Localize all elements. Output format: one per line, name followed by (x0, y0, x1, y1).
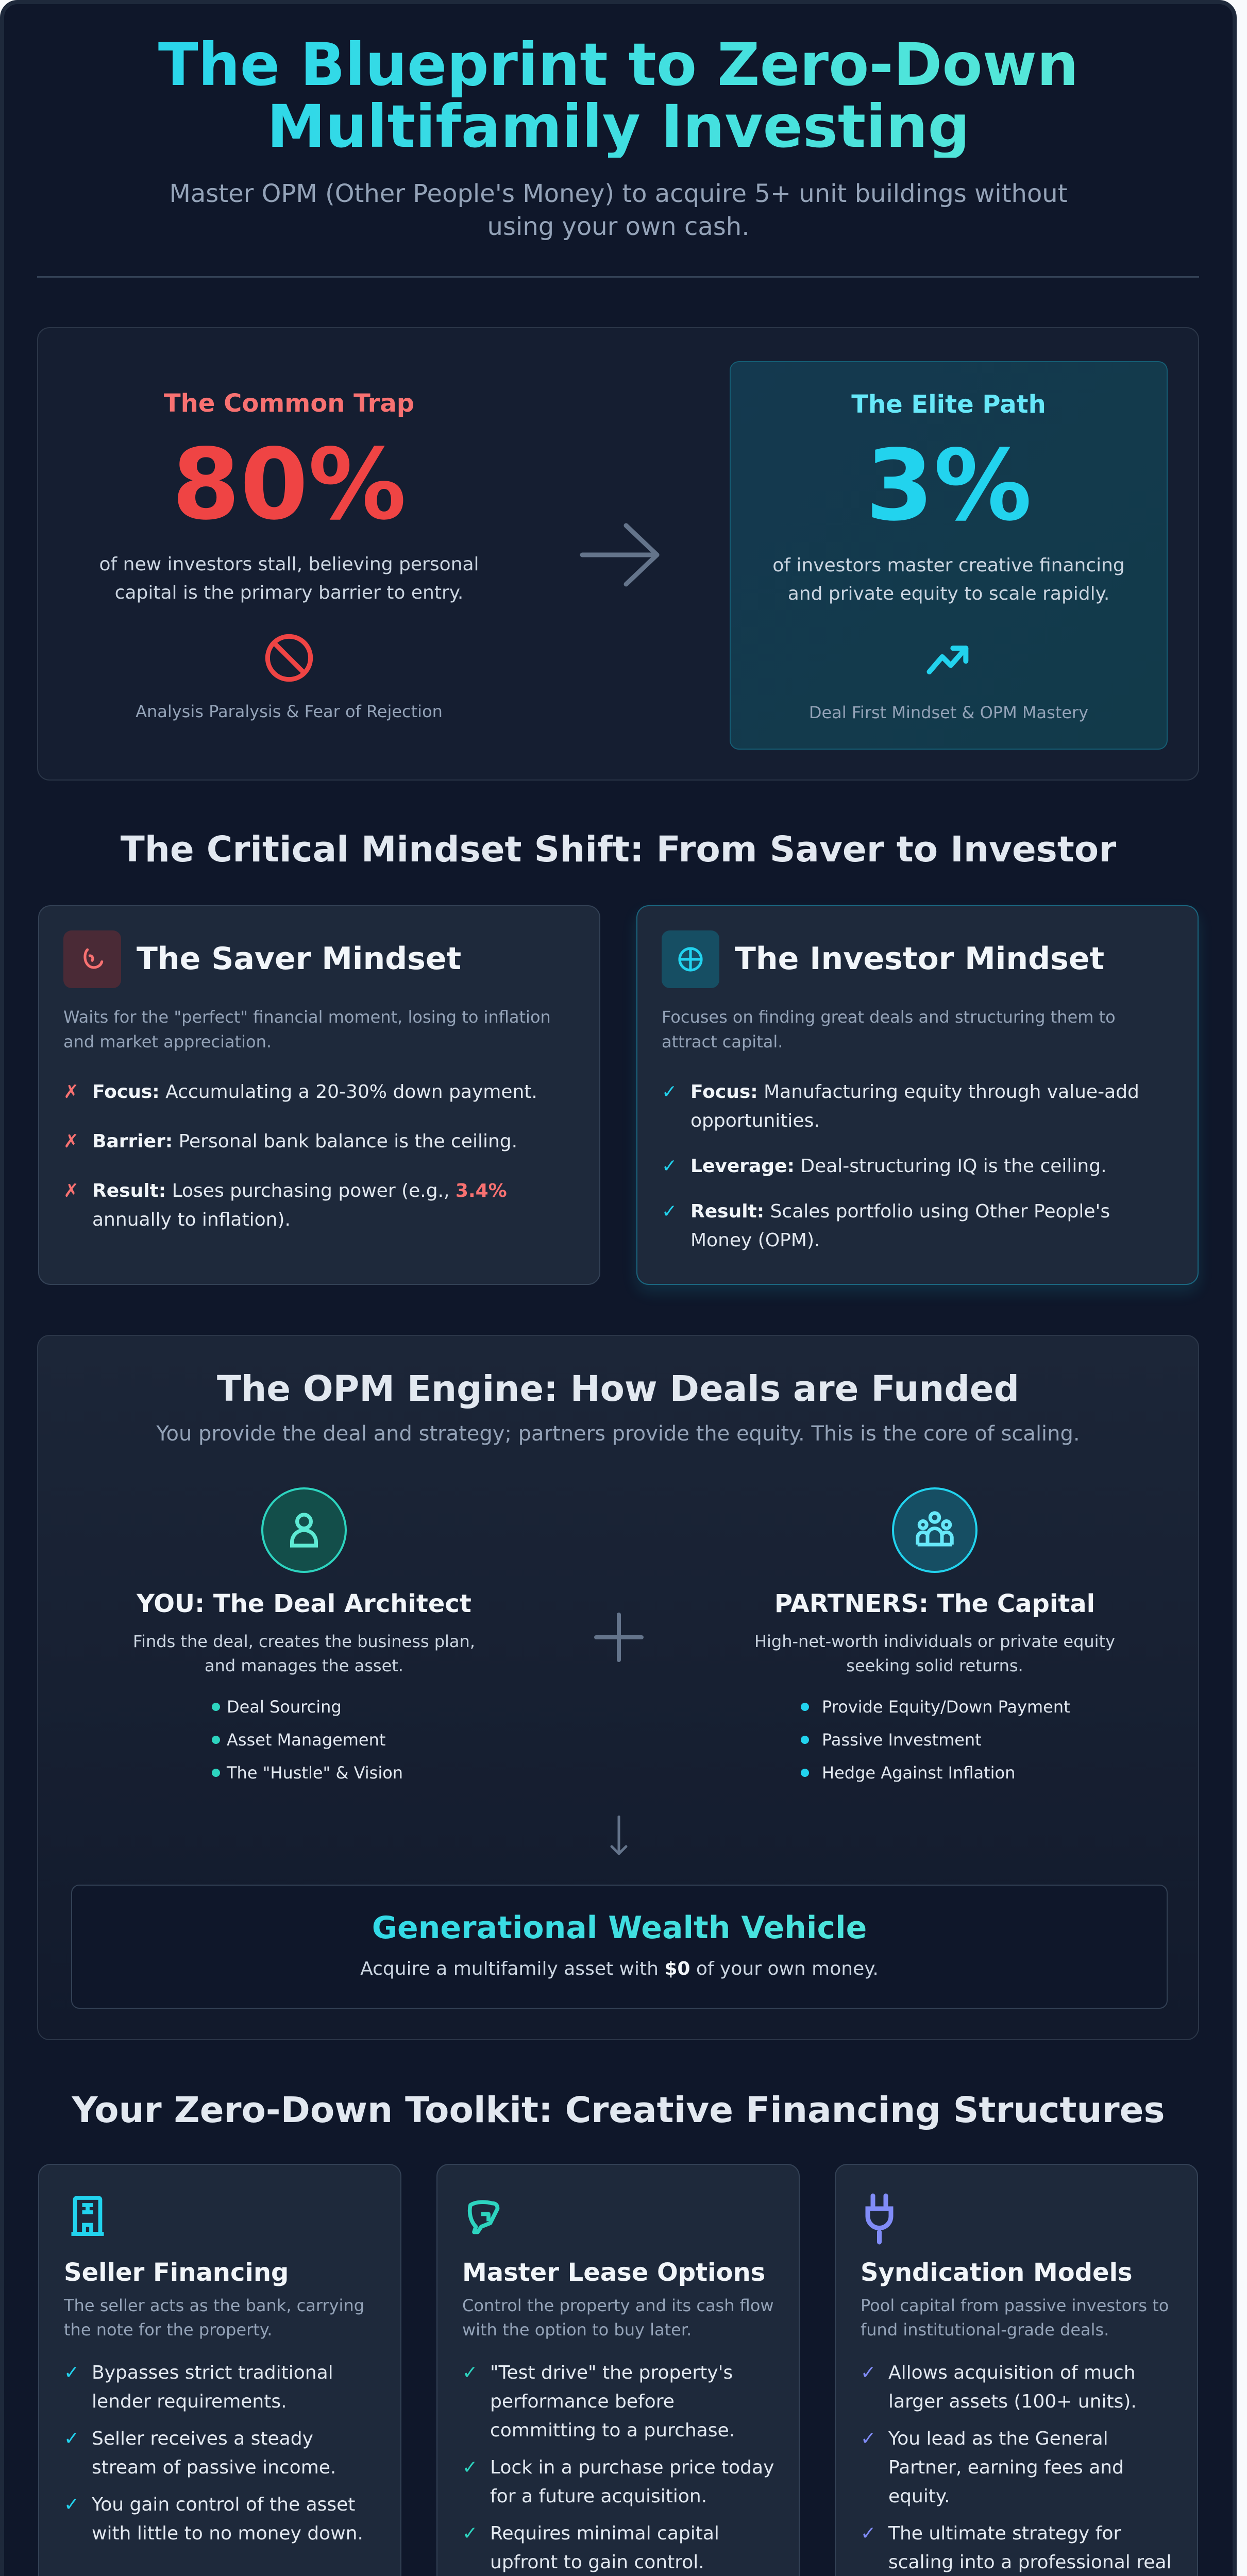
stat: elite path: The Elite Path (851, 390, 1046, 419)
panel: syndication: Pool capital from passive investors to (861, 2296, 1169, 2315)
column: partners: High-net-worth individuals or private equity (754, 1632, 1115, 1651)
title: Multifamily Investing (267, 92, 970, 161)
list: investor traits: Focus: Manufacturing equity through value-add (690, 1081, 1139, 1103)
icon: investor (662, 930, 719, 988)
stat: elite path (730, 361, 1168, 750)
icon: plus (594, 1613, 644, 1662)
panel: master lease: Control the property and its cash flow (462, 2296, 774, 2315)
panel: syndication: Allows acquisition of much (888, 2362, 1136, 2383)
stat: elite path: Deal First Mindset & OPM Mastery (809, 703, 1088, 722)
icon: saver (63, 930, 121, 988)
list: investor traits (662, 1081, 1139, 1251)
panel: syndication: equity. (888, 2486, 950, 2507)
panel: syndication: ✓ (861, 2523, 876, 2544)
icon: building (71, 2196, 104, 2236)
panel: OPM engine: The OPM Engine: How Deals are Funded (217, 1368, 1019, 1410)
panel: master lease: Requires minimal capital (490, 2523, 719, 2544)
panel: seller financing: ✓ (64, 2494, 79, 2515)
list: investor traits: ✓ (662, 1201, 677, 1222)
panel: master lease: ✓ (462, 2523, 478, 2544)
panel: syndication: fund institutional-grade deals. (861, 2320, 1109, 2340)
panel: seller financing: ✓ (64, 2428, 79, 2449)
column: you: Deal Sourcing (227, 1697, 342, 1717)
stat: elite path: 3% (866, 429, 1032, 543)
panel: saver mindset (38, 905, 600, 1285)
stat: common trap: capital is the primary barrier to entry. (115, 582, 463, 603)
panel: OPM engine (37, 1335, 1199, 2040)
icon: handshake (468, 2200, 500, 2234)
panel: saver mindset: and market appreciation. (63, 1032, 272, 1052)
column: partners: seeking solid returns. (846, 1656, 1023, 1675)
panel: syndication: ✓ (861, 2362, 876, 2383)
stat: common trap: Analysis Paralysis & Fear of Rejection (136, 702, 443, 721)
panel: master lease: ✓ (462, 2457, 478, 2478)
icon: ban (265, 634, 313, 682)
panel: master lease: ✓ (462, 2362, 478, 2383)
panel: seller financing: ✓ (64, 2362, 79, 2383)
panel: syndication: Partner, earning fees and (888, 2457, 1124, 2478)
panel: master lease: for a future acquisition. (490, 2486, 707, 2507)
icon: person (261, 1487, 347, 1573)
panel: saver mindset: The Saver Mindset (137, 941, 461, 977)
panel: seller financing: You gain control of the asset (92, 2494, 355, 2515)
panel: syndication: The ultimate strategy for (888, 2523, 1121, 2544)
stat: elite path: of investors master creative financing (772, 555, 1125, 576)
panel: seller financing: the note for the property. (64, 2320, 272, 2340)
callout: wealth vehicle: Acquire a multifamily asset with $0 of your own money. (360, 1958, 879, 1979)
panel: seller financing: Seller Financing (64, 2258, 289, 2287)
heading: mindset shift: The Critical Mindset Shift: From Saver to Investor (121, 829, 1116, 870)
list: saver traits: annually to inflation). (92, 1209, 291, 1230)
list: investor traits: ✓ (662, 1156, 677, 1177)
icon: group (892, 1487, 978, 1573)
stat: common trap: 80% (172, 428, 406, 541)
column: you: YOU: The Deal Architect (137, 1589, 471, 1618)
panel: syndication: You lead as the General (888, 2428, 1108, 2449)
stat: common trap (99, 389, 479, 721)
panel: syndication: larger assets (100+ units). (888, 2391, 1137, 2412)
list: investor traits: Result: Scales portfolio using Other People's (690, 1201, 1110, 1222)
panel: master lease: "Test drive" the property's (490, 2362, 733, 2383)
panel: seller financing: The seller acts as the bank, carrying (64, 2296, 364, 2315)
panel: seller financing: Bypasses strict traditional (92, 2362, 333, 2383)
panel: investor mindset: Focuses on finding great deals and structuring them to (662, 1007, 1116, 1027)
list: investor traits: Money (OPM). (690, 1230, 820, 1251)
panel: syndication: Syndication Models (861, 2258, 1133, 2287)
subtitle: Master OPM (Other People's Money) to acquire 5+ unit buildings without (169, 179, 1068, 208)
panel: syndication (835, 2164, 1198, 2576)
list: saver traits: ✗ (63, 1131, 79, 1152)
list: saver traits: Result: Loses purchasing power (e.g., 3.4% (92, 1180, 507, 1201)
subtitle: using your own cash. (487, 212, 749, 241)
column: partners: Hedge Against Inflation (822, 1763, 1015, 1783)
panel: seller financing: lender requirements. (92, 2391, 287, 2412)
column: partners: Provide Equity/Down Payment (822, 1697, 1070, 1717)
stat: elite path: and private equity to scale rapidly. (788, 583, 1109, 604)
list: investor traits: Leverage: Deal-structuring IQ is the ceiling. (690, 1156, 1107, 1177)
panel: syndication: ✓ (861, 2428, 876, 2449)
panel: stats comparison (37, 327, 1199, 781)
panel: syndication: scaling into a professional real (888, 2552, 1171, 2573)
panel: master lease: with the option to buy later. (462, 2320, 692, 2340)
list: saver traits: ✗ (63, 1081, 79, 1103)
panel: master lease: performance before (490, 2391, 675, 2412)
title: The Blueprint to Zero-Down (158, 30, 1079, 99)
list: investor traits: ✓ (662, 1081, 677, 1103)
panel: investor mindset: attract capital. (662, 1032, 783, 1052)
panel: master lease: committing to a purchase. (490, 2420, 735, 2441)
list: saver traits (63, 1081, 537, 1230)
column: you: Asset Management (227, 1730, 385, 1750)
panel: investor mindset (636, 905, 1199, 1285)
heading: toolkit: Your Zero-Down Toolkit: Creative Financing Structures (72, 2090, 1165, 2131)
icon: plug (866, 2194, 894, 2244)
panel: master lease: Lock in a purchase price today (490, 2457, 774, 2478)
column: partners: Passive Investment (822, 1730, 982, 1750)
panel: OPM engine: You provide the deal and strategy; partners provide the equity. This is the core of scaling. (156, 1422, 1080, 1446)
stat: common trap: The Common Trap (164, 389, 414, 418)
column: you (133, 1487, 475, 1783)
panel: investor mindset: The Investor Mindset (735, 941, 1104, 977)
icon: trending up (926, 646, 969, 674)
list: saver traits: ✗ (63, 1180, 79, 1201)
subtitle (169, 179, 1068, 241)
panel: seller financing: with little to no money down. (92, 2523, 363, 2544)
list: saver traits: Barrier: Personal bank balance is the ceiling. (92, 1131, 517, 1152)
panel: seller financing: Seller receives a steady (92, 2428, 313, 2449)
panel: seller financing (38, 2164, 401, 2576)
list: investor traits: opportunities. (690, 1110, 820, 1131)
panel: master lease: upfront to gain control. (490, 2552, 704, 2573)
stat: common trap: of new investors stall, believing personal (99, 554, 479, 575)
column: you: and manages the asset. (205, 1656, 403, 1675)
panel: master lease: Master Lease Options (462, 2258, 765, 2287)
column: you: The "Hustle" & Vision (227, 1763, 403, 1783)
column: you: Finds the deal, creates the business plan, (133, 1632, 475, 1651)
column: partners: PARTNERS: The Capital (774, 1589, 1095, 1618)
arrow (580, 523, 660, 586)
callout: wealth vehicle (71, 1885, 1168, 2009)
panel: seller financing: stream of passive income. (92, 2457, 336, 2478)
panel: saver mindset: Waits for the "perfect" financial moment, losing to inflation (63, 1007, 551, 1027)
column: partners (754, 1487, 1115, 1783)
arrow: down (610, 1816, 628, 1855)
list: saver traits: Focus: Accumulating a 20-30% down payment. (92, 1081, 537, 1103)
title (0, 34, 1237, 158)
panel: master lease (436, 2164, 800, 2576)
callout: wealth vehicle: Generational Wealth Vehicle (372, 1910, 867, 1946)
